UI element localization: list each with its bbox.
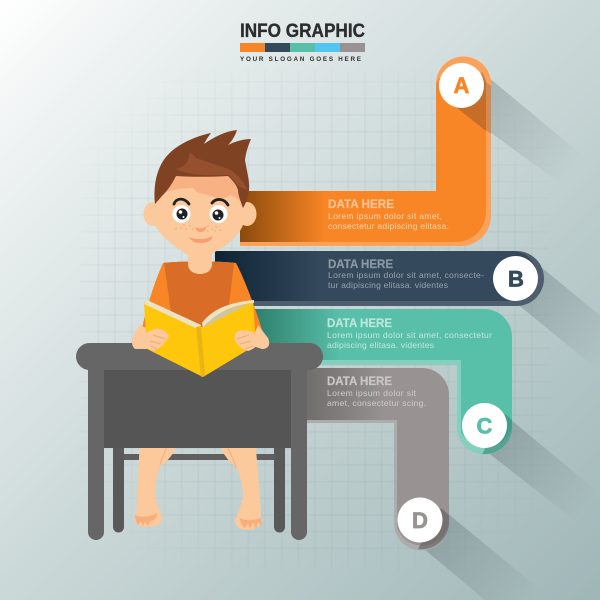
text A xyxy=(328,199,449,231)
background grid xyxy=(98,80,532,549)
text A: consectetur adipiscing elitasa. xyxy=(328,221,449,231)
band D: gray xyxy=(300,368,449,550)
badge B: B xyxy=(508,266,524,292)
hands xyxy=(143,329,258,351)
badge A: A xyxy=(454,73,470,98)
ears xyxy=(144,202,256,226)
text B: tur adipiscing elitasa. videntes xyxy=(328,280,448,290)
desk top, panel and front legs xyxy=(76,343,323,540)
badge C: C xyxy=(477,414,493,438)
long shadow C xyxy=(482,414,600,540)
text D xyxy=(327,376,426,408)
band B: navy xyxy=(215,251,544,306)
face xyxy=(155,180,244,258)
text D: DATA HERE xyxy=(327,376,392,388)
illustration: boy reading at desk xyxy=(76,130,323,540)
text C: DATA HERE xyxy=(327,318,392,330)
nose xyxy=(195,226,206,232)
text B: DATA HERE xyxy=(328,259,393,271)
badge C xyxy=(462,403,507,448)
long shadow A xyxy=(457,72,600,205)
open book xyxy=(144,300,256,377)
badge A xyxy=(439,63,484,108)
hair xyxy=(154,130,251,208)
neck xyxy=(188,248,212,274)
long shadow D xyxy=(418,508,565,600)
text C: Lorem ipsum dolor sit amet, consectetur xyxy=(327,330,492,340)
shirt xyxy=(140,262,263,336)
title block: YOUR SLOGAN GOES HERE xyxy=(240,56,361,63)
text C: adipiscing elitasa. videntes xyxy=(327,340,434,350)
mouth xyxy=(189,236,213,243)
long shadow B xyxy=(515,262,600,388)
eyes xyxy=(172,199,228,223)
text B: Lorem ipsum dolor sit amet, consecte- xyxy=(328,270,484,280)
title block: INFO GRAPHIC xyxy=(240,21,365,42)
text C xyxy=(327,318,492,350)
arms xyxy=(132,325,269,349)
text A: Lorem ipsum dolor sit amet, xyxy=(328,211,442,221)
text B xyxy=(328,259,484,290)
badge B xyxy=(493,256,538,301)
text A: DATA HERE xyxy=(328,199,394,211)
badge D xyxy=(398,498,442,542)
text D: Lorem ipsum dolor sit xyxy=(327,388,417,398)
freckles xyxy=(175,224,221,232)
band C: teal xyxy=(255,309,512,454)
title block xyxy=(240,21,365,63)
band A: orange xyxy=(240,56,491,246)
text D: amet, consectetur scing. xyxy=(327,398,426,408)
desk back legs xyxy=(113,440,285,532)
forehead shadow xyxy=(162,174,243,201)
boy legs and feet xyxy=(135,440,262,530)
badge D: D xyxy=(412,508,428,533)
